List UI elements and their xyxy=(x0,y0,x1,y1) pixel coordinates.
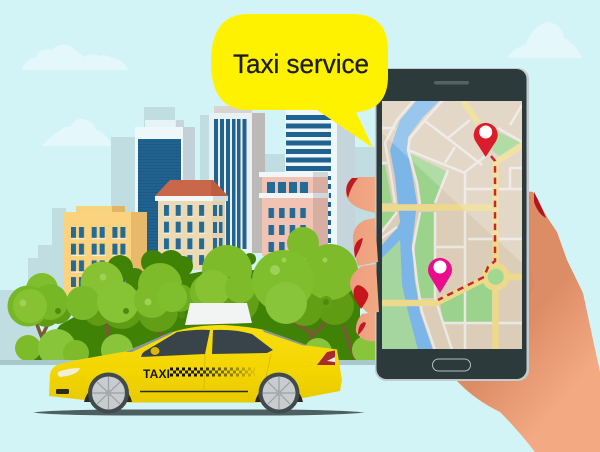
tail light xyxy=(317,350,335,365)
speaker xyxy=(434,81,469,84)
door lines xyxy=(204,354,271,391)
bubble title: Taxi service xyxy=(233,49,369,79)
phone body xyxy=(375,68,529,381)
pale distant skyline xyxy=(0,107,376,362)
tower: striped beige xyxy=(209,106,265,253)
tree right large xyxy=(252,227,358,326)
trunks xyxy=(36,318,354,358)
thumb shade beside phone xyxy=(528,257,535,300)
phone xyxy=(375,68,529,381)
yellow roads xyxy=(382,100,524,349)
route xyxy=(438,156,495,300)
building: pink xyxy=(259,172,329,256)
hand palm and thumb behind phone xyxy=(457,192,600,452)
rear wheel xyxy=(255,372,303,414)
little finger xyxy=(356,312,375,341)
fingers xyxy=(346,177,546,341)
dark foliage backdrop xyxy=(32,250,360,362)
tree right centre xyxy=(190,245,259,324)
parks xyxy=(382,132,522,349)
magenta pin xyxy=(428,258,452,293)
diagonal light overlay xyxy=(382,101,522,263)
ring finger xyxy=(350,264,379,313)
rear window xyxy=(212,330,273,354)
tree left centre xyxy=(66,262,144,329)
lower sill xyxy=(140,390,248,392)
tree centre xyxy=(134,263,194,332)
index finger xyxy=(346,177,375,213)
front wheel xyxy=(84,372,132,414)
car shadow xyxy=(33,410,365,416)
taxi car xyxy=(33,303,365,416)
trees xyxy=(8,227,380,367)
thumb nail xyxy=(534,192,546,218)
building: yellow xyxy=(63,206,147,297)
windshield xyxy=(125,332,173,352)
white streets xyxy=(382,100,522,350)
car body xyxy=(49,325,342,402)
low bushes xyxy=(15,329,380,367)
rear glass xyxy=(262,329,308,346)
speech bubble xyxy=(211,14,388,148)
home button xyxy=(432,359,470,371)
roof sign xyxy=(185,303,252,325)
tower: blue glass xyxy=(135,120,195,267)
river xyxy=(382,100,440,350)
fog light xyxy=(56,389,69,394)
ground horizon strip xyxy=(0,360,375,365)
building: red roof xyxy=(155,180,228,270)
front window xyxy=(141,330,210,357)
middle finger xyxy=(353,218,378,266)
headlight xyxy=(58,368,80,377)
tree far left xyxy=(8,273,72,327)
map xyxy=(382,100,524,350)
taxi label: TAXI xyxy=(143,367,170,381)
roundabout xyxy=(482,263,510,291)
red pin xyxy=(474,123,498,157)
mirror xyxy=(150,346,160,356)
clouds xyxy=(22,22,582,146)
checker stripe xyxy=(170,367,256,377)
tower: right with horizontal stripes xyxy=(285,110,355,260)
